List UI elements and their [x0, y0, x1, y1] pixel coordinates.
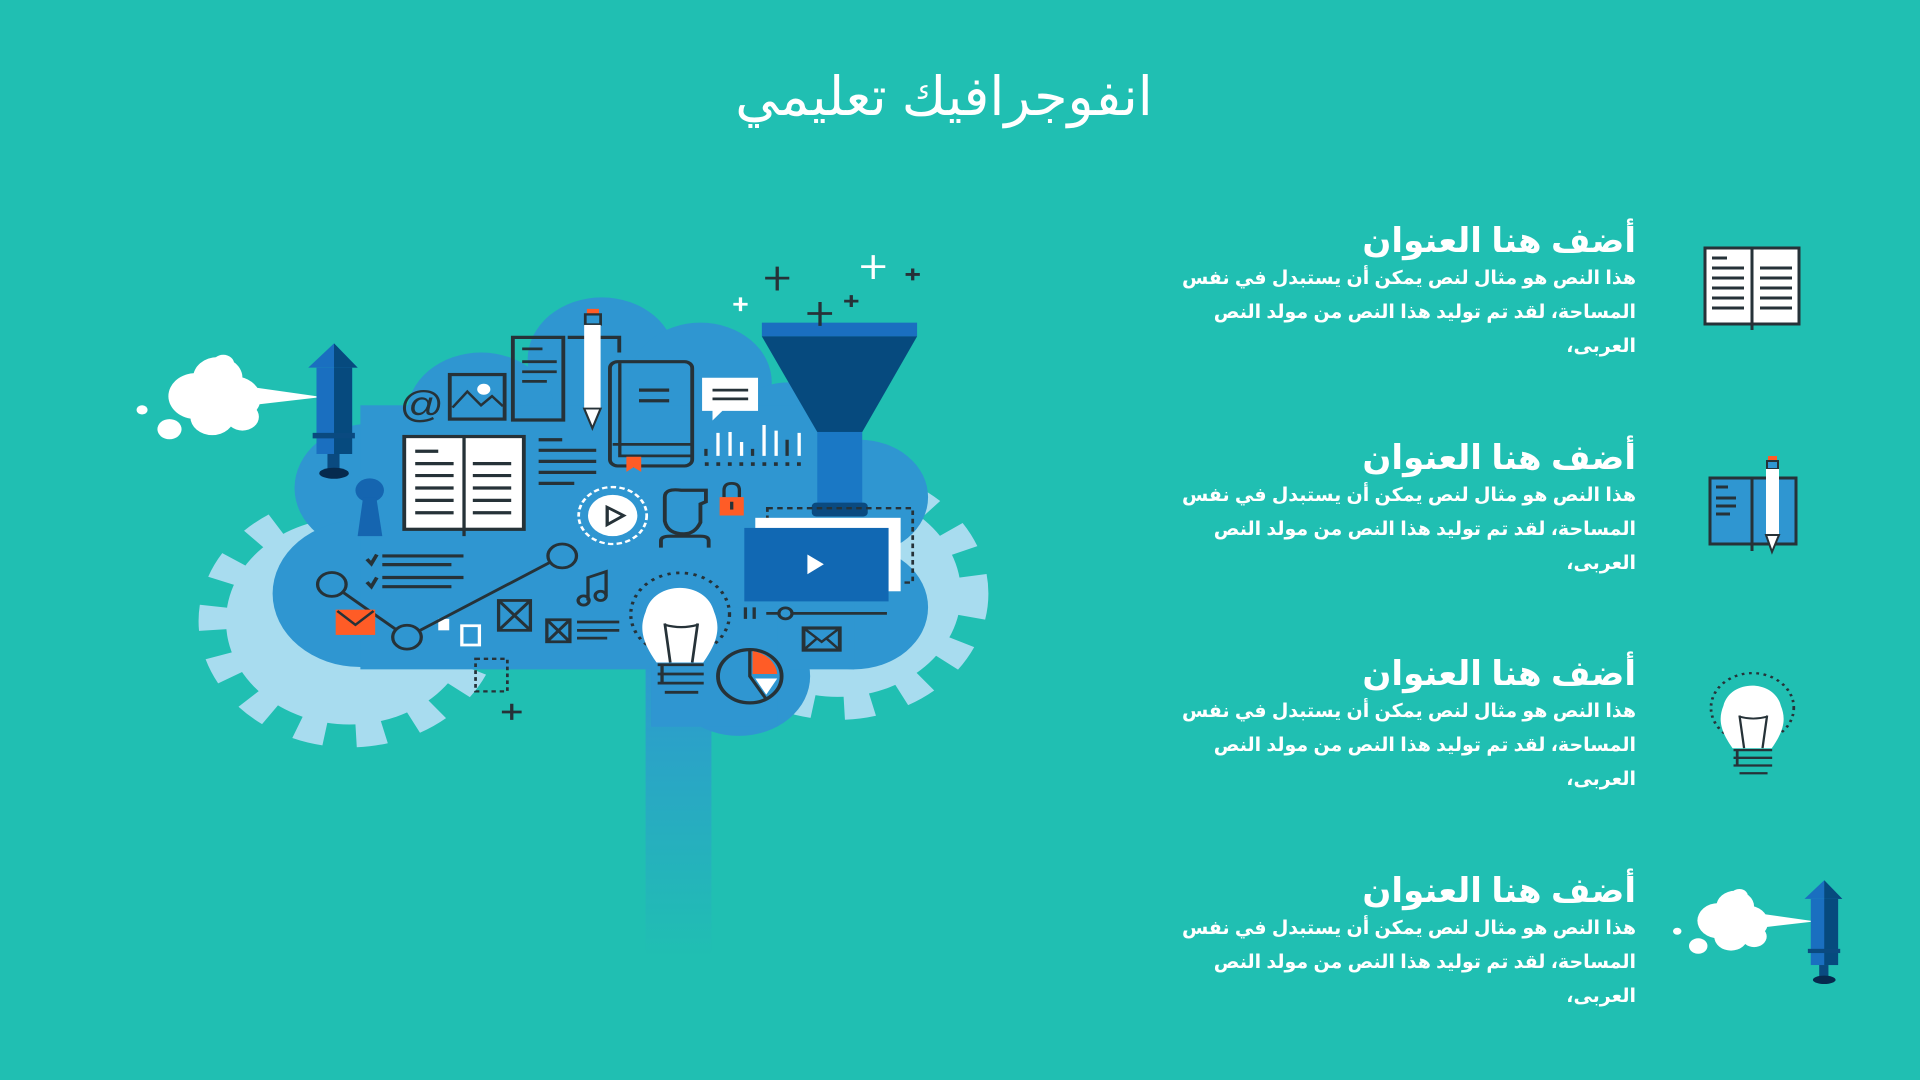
text block 1: أضف هنا العنوان — [1362, 222, 1636, 260]
text block 3: المساحة، لقد تم توليد هذا النص من مولد النص — [1214, 735, 1636, 756]
gears — [218, 483, 969, 731]
notebook — [610, 362, 692, 466]
text block 4: أضف هنا العنوان — [1362, 872, 1636, 910]
music, boxes — [588, 572, 606, 600]
icon: book and pencil — [1710, 456, 1796, 552]
bulb — [631, 573, 730, 692]
rocket & cloud — [137, 343, 358, 479]
video — [767, 508, 913, 583]
text lines — [539, 440, 596, 483]
trunk — [646, 653, 711, 956]
text block 3 — [1182, 651, 1636, 790]
lock — [724, 483, 739, 497]
speech bubble & chart — [702, 378, 758, 420]
funnel — [762, 323, 917, 336]
@ and image: @ — [400, 383, 444, 425]
icon: light bulb — [1711, 673, 1794, 773]
sparkles — [765, 267, 920, 326]
text block 4: العربى، — [1566, 986, 1636, 1007]
doc book & pencil — [513, 337, 619, 420]
text block 1: هذا النص هو مثال لنص يمكن أن يستبدل في نفس — [1182, 268, 1636, 289]
text block 1: العربى، — [1566, 336, 1636, 357]
text block 2: هذا النص هو مثال لنص يمكن أن يستبدل في نفس — [1182, 485, 1636, 506]
text block 4 — [1182, 868, 1636, 1007]
text block 4: هذا النص هو مثال لنص يمكن أن يستبدل في نفس — [1182, 918, 1636, 939]
pie — [718, 650, 782, 703]
text block 2: أضف هنا العنوان — [1362, 439, 1636, 477]
brain body — [273, 297, 928, 736]
text block 3: العربى، — [1566, 769, 1636, 790]
text block 1: المساحة، لقد تم توليد هذا النص من مولد النص — [1214, 302, 1636, 323]
title: انفوجرافيك تعليمي — [735, 67, 1153, 127]
main tree graphic — [137, 255, 969, 956]
text block 4: المساحة، لقد تم توليد هذا النص من مولد النص — [1214, 952, 1636, 973]
text block 3: هذا النص هو مثال لنص يمكن أن يستبدل في نفس — [1182, 701, 1636, 722]
text block 2 — [1182, 435, 1636, 574]
text block 2: المساحة، لقد تم توليد هذا النص من مولد النص — [1214, 519, 1636, 540]
play circle — [579, 487, 647, 544]
open book — [404, 437, 524, 529]
network — [332, 556, 562, 637]
text block 3: أضف هنا العنوان — [1362, 655, 1636, 693]
text block 1 — [1182, 218, 1636, 357]
text block 2: العربى، — [1566, 553, 1636, 574]
icon: rocket and cloud — [1673, 880, 1842, 984]
keyhole — [355, 478, 384, 502]
person — [665, 490, 706, 534]
icon: book — [1705, 248, 1799, 330]
